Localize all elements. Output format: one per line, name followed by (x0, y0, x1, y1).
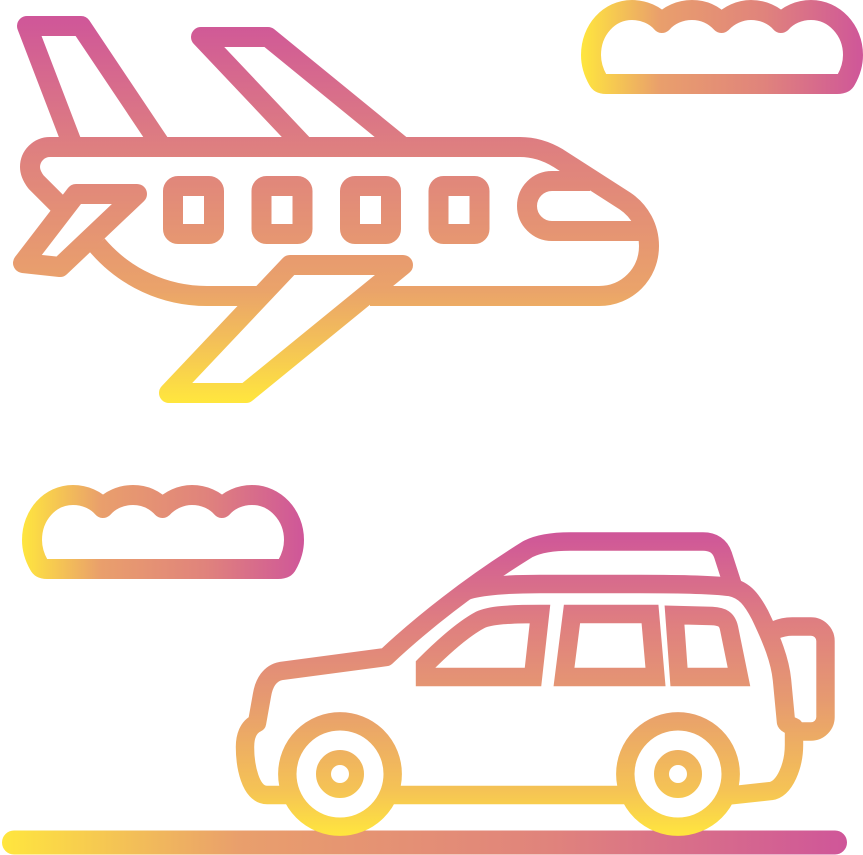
roof line and rear body (466, 584, 794, 796)
upper wing (201, 37, 404, 148)
car (245, 542, 826, 827)
middle window (564, 614, 656, 677)
cockpit window (527, 181, 645, 231)
tail fin (27, 26, 162, 147)
cloud: top right (591, 10, 853, 84)
fuselage upper outline (30, 147, 649, 296)
spare wheel cover (775, 626, 826, 732)
fuselage lower belly (97, 245, 260, 296)
sill (388, 786, 630, 804)
cabin windows (173, 186, 480, 234)
airplane (23, 26, 649, 393)
lower wing (169, 265, 403, 393)
rear stabilizer (23, 194, 137, 267)
front wheel (287, 721, 393, 827)
hood and roof rack outline (245, 542, 733, 795)
rear wheel (625, 721, 731, 827)
road (14, 830, 835, 854)
rear window (674, 615, 739, 677)
cloud: middle left (32, 495, 294, 569)
front window (425, 614, 540, 677)
